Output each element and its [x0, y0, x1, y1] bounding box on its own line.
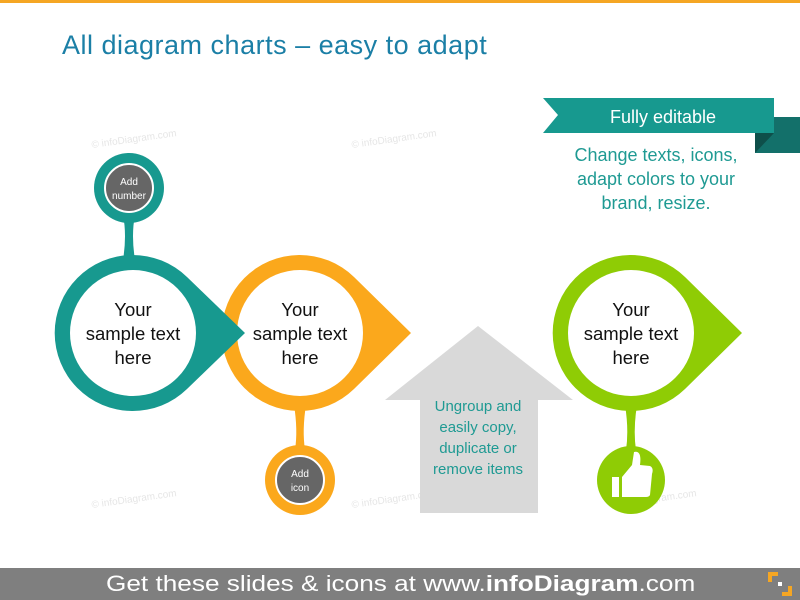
watermarks: © infoDiagram.com [351, 128, 437, 151]
gray arrow: easily copy, [439, 419, 517, 436]
orange pin with icon: sample text [253, 323, 347, 344]
orange pin with icon: here [281, 347, 319, 368]
watermarks: © infoDiagram.com [91, 488, 177, 511]
teal pin with number: Add [120, 177, 138, 188]
callout text: brand, resize. [601, 193, 711, 213]
teal pin with number: Your [114, 299, 152, 320]
teal pin with number: number [112, 191, 147, 202]
gray arrow: Ungroup and [435, 398, 521, 415]
footer [0, 568, 800, 600]
callout text: Change texts, icons, [574, 145, 738, 165]
gray arrow: duplicate or [439, 440, 517, 457]
ribbon: Fully editable [543, 98, 800, 153]
gray arrow: remove items [433, 461, 523, 478]
top accent line [0, 0, 800, 3]
orange pin with icon: Your [281, 299, 319, 320]
watermarks [91, 128, 697, 511]
callout text: adapt colors to your [577, 169, 735, 189]
watermarks: © infoDiagram.com [351, 488, 437, 511]
footer: Get these slides & icons at www.infoDiagram.com [106, 571, 695, 596]
teal pin with number [55, 153, 245, 411]
green pin with thumb icon: Your [612, 299, 650, 320]
teal pin with number: here [114, 347, 152, 368]
orange pin with icon: icon [291, 483, 309, 494]
green pin with thumb icon: here [612, 347, 650, 368]
title: All diagram charts – easy to adapt [62, 30, 487, 60]
green pin with thumb icon [553, 255, 742, 514]
teal pin with number: sample text [86, 323, 180, 344]
watermarks: © infoDiagram.com [91, 128, 177, 151]
orange pin with icon [222, 255, 411, 515]
gray arrow [385, 326, 573, 513]
ribbon: Fully editable: Fully editable [610, 107, 716, 127]
watermarks: © infoDiagram.com [611, 488, 697, 511]
logo icon [768, 572, 792, 596]
green pin with thumb icon: sample text [584, 323, 678, 344]
orange pin with icon: Add [291, 469, 309, 480]
